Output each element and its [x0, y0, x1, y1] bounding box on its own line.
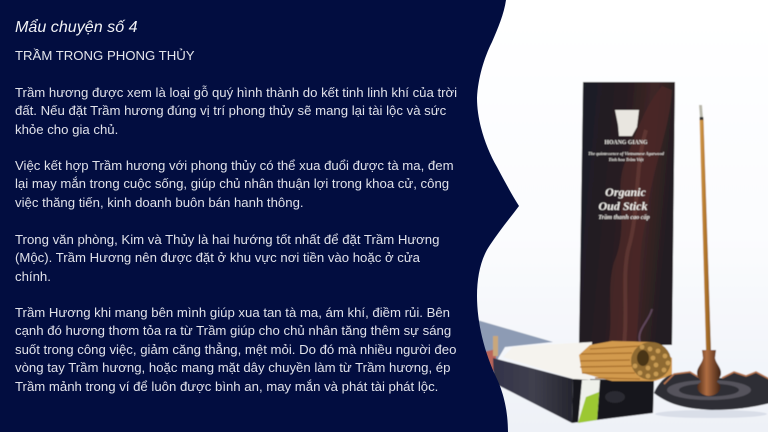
box tagline: The quintessence of Vietnamese Agarwood	[588, 151, 665, 156]
incense stick	[699, 105, 711, 350]
paragraph 4: suốt trong công việc, giảm căng thẳng, mệt mỏi. Do đó mà nhiều người đeo	[15, 342, 456, 357]
product photo	[470, 0, 768, 432]
photo background	[470, 0, 768, 432]
paragraph 4: vòng tay Trầm hương, hoặc mang mặt dây chuyền làm từ Trầm hương, ép	[15, 360, 450, 375]
paragraph 4: Trầm mảnh trong ví để luôn được bình an, may mắn và phát tài phát lộc.	[15, 379, 438, 394]
black bar with label	[493, 358, 654, 423]
paragraph 1	[15, 85, 457, 137]
subtitle: TRẦM TRONG PHONG THỦY	[15, 48, 195, 63]
white paper wrap	[503, 342, 592, 380]
paragraph 3: Trong văn phòng, Kim và Thủy là hai hướng tốt nhất để đặt Trầm Hương	[15, 232, 439, 247]
box product subtitle: Trầm thanh cao cấp	[598, 214, 650, 221]
paragraph 2	[15, 158, 454, 210]
box logo	[615, 110, 639, 136]
incense box	[579, 82, 675, 345]
box product name two: Oud Stick	[598, 199, 648, 213]
navy panel	[0, 0, 519, 432]
paragraph 3	[15, 232, 439, 284]
box tagline two: Tinh hoa Trầm Việt	[609, 157, 644, 162]
smoke on box	[639, 309, 652, 342]
incense plate	[654, 372, 768, 418]
copper holder	[697, 350, 721, 396]
paragraph 1: đất. Nếu đặt Trầm hương đúng vị trí phong thủy sẽ mang lại tài lộc và sức	[15, 103, 446, 118]
box product name: Organic	[605, 185, 647, 199]
box brand text: HOANG GIANG	[604, 140, 648, 146]
paragraph 4	[15, 305, 456, 394]
bundle of incense sticks	[579, 341, 672, 381]
rear bar	[477, 320, 553, 372]
paragraph 3: (Mộc). Trầm Hương nên được đặt ở khu vực nơi tiền vào hoặc ở cửa	[15, 250, 420, 265]
paragraph 1: khỏe cho gia chủ.	[15, 122, 118, 137]
paragraph 2: việc thăng tiến, kinh doanh buôn bán hanh thông.	[15, 195, 304, 210]
red strip	[484, 349, 496, 372]
paragraph 3: chính.	[15, 269, 51, 284]
title: Mẩu chuyện số 4	[15, 18, 138, 36]
twine	[493, 336, 498, 356]
paragraph 4: cạnh đó hương thơm tỏa ra từ Trầm giúp cho chủ nhân tăng thêm sự sáng	[15, 323, 451, 338]
paragraph 1: Trầm hương được xem là loại gỗ quý hình thành do kết tinh linh khí của trời	[15, 85, 457, 100]
paragraph 2: Việc kết hợp Trầm hương với phong thủy có thể xua đuổi được tà ma, đem	[15, 158, 454, 173]
paragraph 2: lại may mắn trong cuộc sống, giúp chủ nhân thuận lợi trong khoa cử, công	[15, 176, 449, 191]
paragraph 4: Trầm Hương khi mang bên mình giúp xua tan tà ma, ám khí, điềm rủi. Bên	[15, 305, 450, 320]
